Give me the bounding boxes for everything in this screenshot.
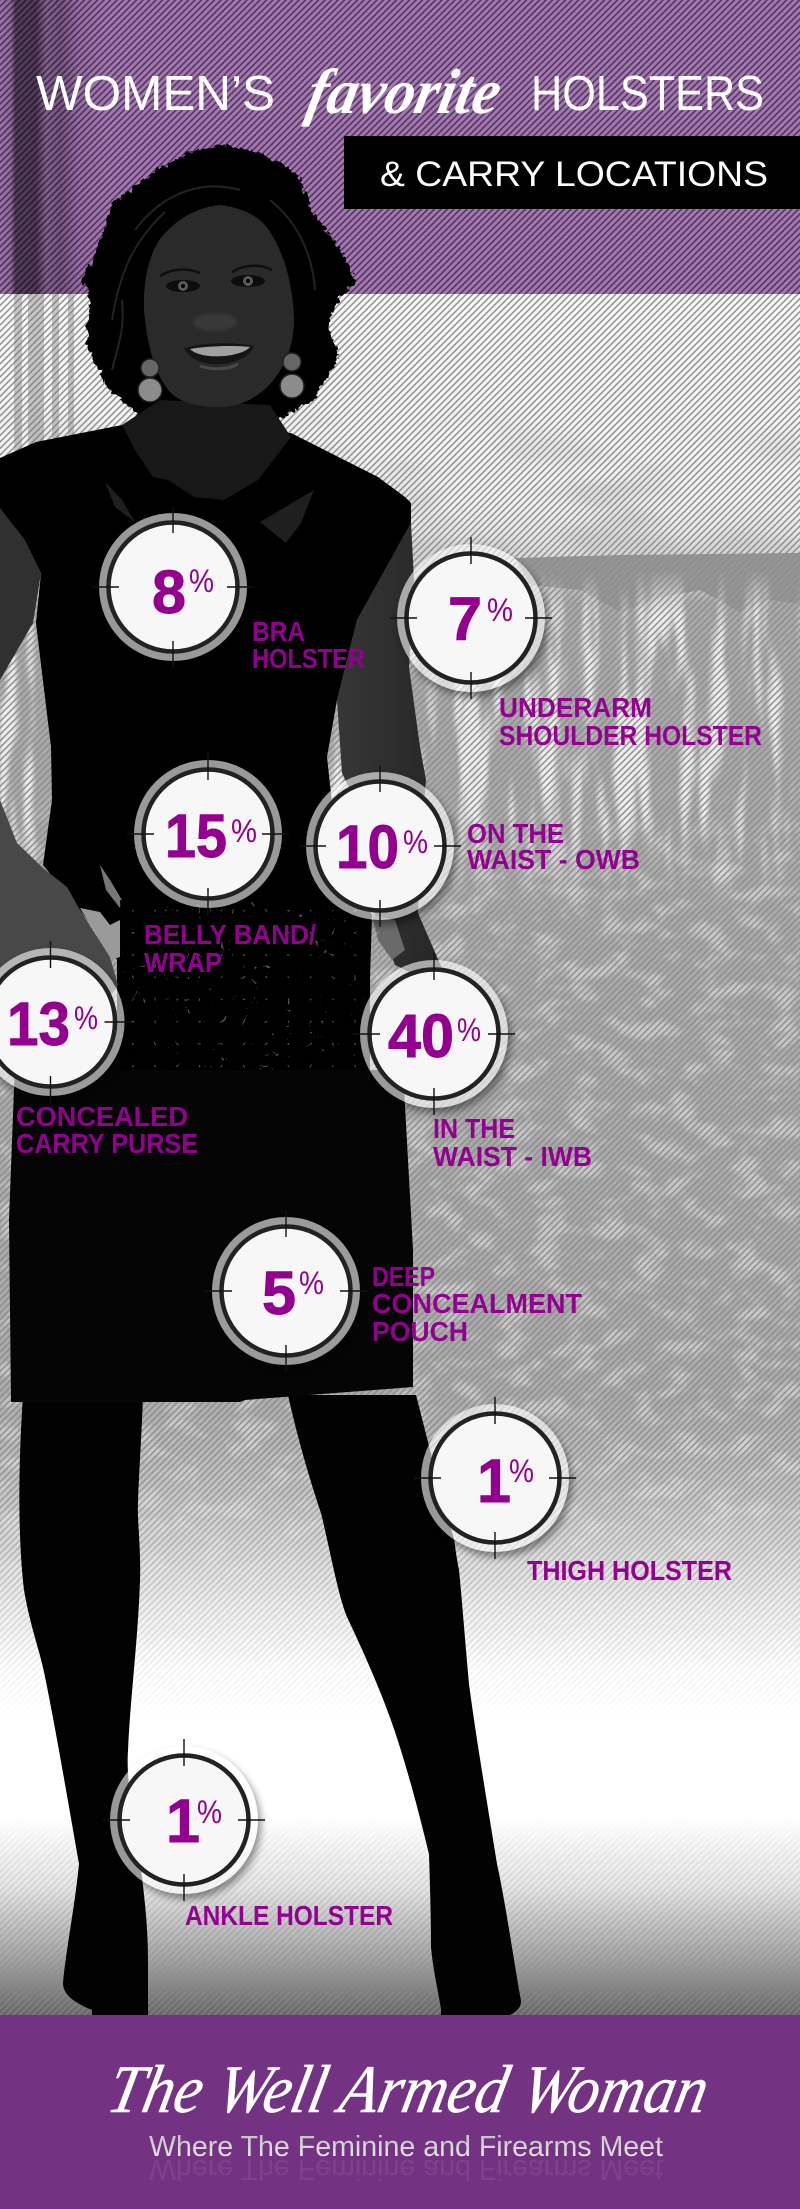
stat: deep concealment pouch 5% [205, 1210, 582, 1372]
background stripes [0, 294, 800, 2015]
stat: ankle holster 1%: 1 [166, 1787, 200, 1855]
stat: in the waist IWB 40%: % [457, 1012, 481, 1048]
stat: deep concealment pouch 5%: 5 [262, 1259, 296, 1327]
stat: concealed carry purse 13%: % [74, 1000, 98, 1036]
title: HOLSTERS [531, 67, 764, 121]
stat: underarm shoulder holster 7% [390, 537, 762, 751]
stat: ankle holster 1% [103, 1739, 393, 1931]
subtitle banner: & CARRY LOCATIONS [380, 155, 768, 194]
left arm [0, 500, 41, 680]
neck [122, 400, 291, 500]
stat: deep concealment pouch 5%: DEEP [372, 1261, 435, 1292]
earrings [138, 353, 304, 402]
eyes [160, 266, 272, 292]
holster metal [80, 865, 145, 960]
header band [0, 0, 800, 294]
stat: belly band 15%: BELLY BAND/ [144, 919, 316, 950]
stat: in the waist IWB 40%: WAIST - IWB [433, 1141, 592, 1172]
stat: concealed carry purse 13% [0, 941, 198, 1159]
hair highlights [112, 186, 315, 370]
stat: belly band 15%: WRAP [144, 947, 222, 978]
stat: in the waist IWB 40%: 40 [388, 1002, 454, 1070]
stat: thigh holster 1%: THIGH HOLSTER [527, 1555, 732, 1586]
legs [19, 1395, 521, 2015]
curtain folds under header [14, 294, 74, 474]
stat: on the waist OWB 10%: % [403, 824, 428, 860]
stat: concealed carry purse 13%: CARRY PURSE [16, 1128, 198, 1159]
stat: on the waist OWB 10%: 10 [336, 813, 399, 881]
purse [120, 900, 380, 1075]
stat: bra holster 8%: 8 [152, 558, 186, 626]
right arm [337, 523, 444, 982]
brand name: The Well Armed Woman [102, 2052, 716, 2127]
stat: belly band 15% [127, 753, 316, 978]
stat: thigh holster 1%: % [509, 1453, 534, 1489]
stat: concealed carry purse 13%: CONCEALED [16, 1101, 188, 1132]
smile [184, 343, 254, 369]
stat: deep concealment pouch 5%: % [299, 1265, 324, 1301]
stat: bra holster 8%: % [189, 563, 214, 599]
stat: belly band 15%: 15 [165, 802, 227, 870]
face [144, 205, 294, 407]
stat: on the waist OWB 10% [299, 765, 640, 927]
stat: bra holster 8%: BRA [252, 616, 305, 647]
skirt [9, 1010, 413, 1402]
stat: in the waist IWB 40%: IN THE [433, 1113, 515, 1144]
stat: underarm shoulder holster 7%: 7 [448, 585, 482, 653]
hair [83, 144, 357, 430]
tagline: Where The Feminine and Firearms Meet [149, 2131, 663, 2163]
stat: ankle holster 1%: ANKLE HOLSTER [185, 1900, 393, 1931]
stat: concealed carry purse 13%: 13 [7, 990, 70, 1058]
stat: thigh holster 1%: 1 [477, 1447, 511, 1515]
stat: ankle holster 1%: % [197, 1794, 222, 1830]
stat: bra holster 8% [92, 506, 365, 674]
footer band [0, 2015, 800, 2209]
title: WOMEN’S [36, 67, 275, 121]
woman figure [0, 144, 521, 2015]
dress cutouts [105, 482, 314, 543]
dress bodice [0, 425, 411, 1075]
stat: thigh holster 1% [414, 1397, 732, 1586]
stat: underarm shoulder holster 7%: UNDERARM [499, 692, 652, 723]
stat: underarm shoulder holster 7%: SHOULDER HOLSTER [499, 720, 762, 751]
background: page [0, 294, 800, 2015]
subtitle banner [344, 136, 800, 209]
left hand [0, 800, 118, 1010]
tagline reflection: Where The Feminine and Firearms Meet [149, 2153, 663, 2185]
right hand metal [372, 915, 405, 960]
stat: on the waist OWB 10%: WAIST - OWB [467, 844, 640, 875]
stat: in the waist IWB 40% [353, 953, 592, 1172]
stat: deep concealment pouch 5%: POUCH [372, 1316, 468, 1347]
stat: deep concealment pouch 5%: CONCEALMENT [372, 1288, 582, 1319]
stat: on the waist OWB 10%: ON THE [467, 818, 564, 849]
stat: bra holster 8%: HOLSTER [252, 643, 365, 674]
title [36, 56, 764, 127]
stat: belly band 15%: % [231, 813, 257, 849]
stat: underarm shoulder holster 7%: % [487, 592, 513, 628]
title: favorite [301, 56, 508, 127]
background: landscape [0, 427, 800, 1534]
